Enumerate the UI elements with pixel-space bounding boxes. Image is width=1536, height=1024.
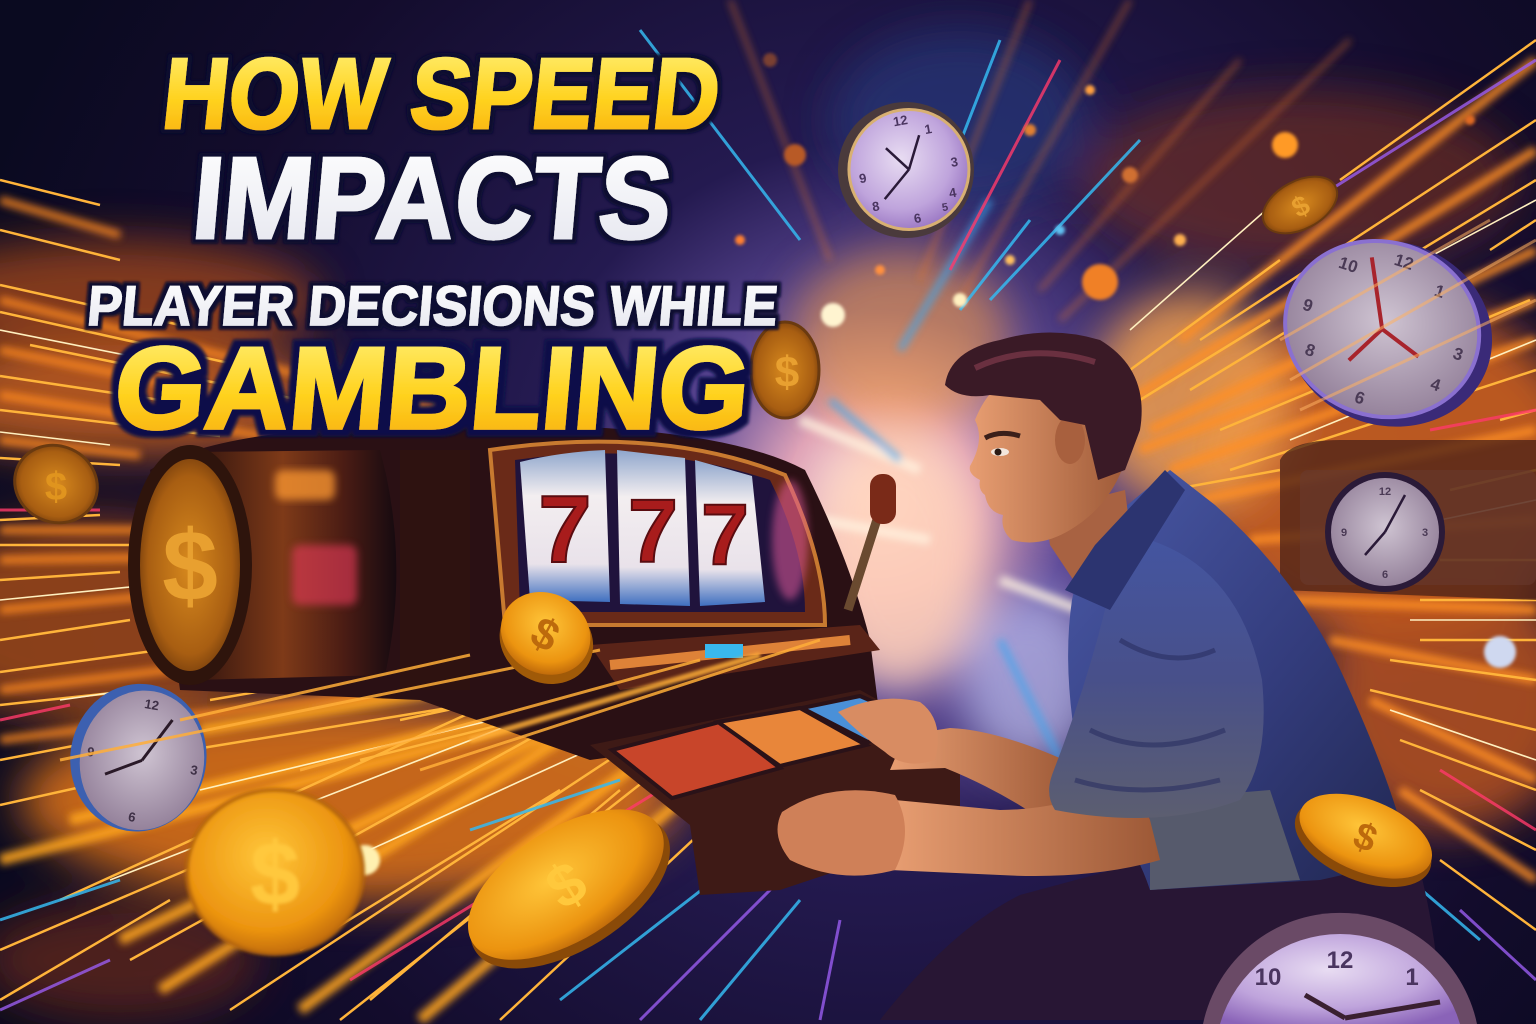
open collar: [1065, 470, 1185, 610]
clock: top centre: 1: [923, 121, 933, 137]
clock: large right: 1: [1432, 281, 1447, 302]
clock: mid right: 12: [1379, 486, 1391, 498]
clock: top centre: 4: [948, 185, 958, 201]
forearm to upper hand: [890, 728, 1075, 825]
clock: bottom right: 10: [1255, 964, 1281, 991]
coin: left edge: [2, 432, 110, 536]
upper hand: [838, 699, 938, 764]
side drum: [190, 450, 396, 680]
eye and brow: [985, 433, 1020, 456]
sleeve folds: [1075, 640, 1225, 790]
clock: large right: 9: [1300, 295, 1315, 316]
clock: large right: 3: [1451, 344, 1466, 365]
title line 4: GAMBLING: [110, 323, 755, 453]
clock: bottom right: 12: [1327, 947, 1353, 974]
ear: [1055, 416, 1085, 464]
title: [85, 38, 780, 453]
coin: behind title: [751, 322, 819, 418]
coin: behind title: $: [775, 348, 799, 397]
clock: top centre: 5: [941, 201, 949, 214]
coin: lower right: [1282, 776, 1446, 905]
title line 3: PLAYER DECISIONS WHILE: [85, 274, 780, 337]
bokeh sparks: [350, 53, 1516, 875]
clock: large right: [1260, 213, 1516, 453]
clock: mid right: [1325, 472, 1445, 592]
coin: large bottom left: $: [250, 825, 300, 925]
clock: large right: 10: [1336, 253, 1360, 277]
clock: large right: 4: [1428, 374, 1443, 395]
clock: lower left: 9: [86, 744, 96, 760]
clock: bottom right: 1: [1405, 964, 1419, 991]
background slot machine silhouette: right: [1280, 440, 1536, 600]
button cards: [612, 722, 780, 798]
clock: bottom right: [1203, 913, 1477, 1024]
clock: top centre: 9: [858, 170, 868, 186]
clock hands: [1365, 495, 1405, 555]
coin: upper right: $: [1287, 189, 1315, 224]
clock: mid right: 9: [1341, 527, 1347, 539]
coin: on slot machine: $: [523, 607, 567, 662]
clock hands: [105, 710, 172, 784]
screen frame: [490, 442, 825, 625]
clock: lower left: 3: [189, 762, 199, 778]
shirt torso: [1068, 470, 1410, 890]
clock: large right: 12: [1392, 250, 1416, 274]
clock hands: [1305, 995, 1440, 1018]
slot machine: $: [162, 510, 218, 622]
lower arm: [890, 780, 1160, 876]
coin: upper right: [1253, 165, 1347, 245]
clock: mid right: 6: [1382, 569, 1388, 581]
clock: large right: 8: [1303, 340, 1317, 361]
coin: lower right: $: [1347, 815, 1383, 861]
coin: bottom centre: $: [534, 848, 598, 922]
lever: [848, 510, 880, 610]
face: [970, 380, 1130, 542]
clock: lower left: 12: [143, 696, 160, 713]
clock: top centre: [827, 91, 985, 249]
clock: top centre: 3: [949, 154, 959, 170]
trousers: [880, 860, 1440, 1020]
coin: bottom centre: [441, 778, 696, 1000]
machine body: [150, 425, 880, 760]
reels with sevens: 7: [628, 482, 678, 582]
coin: large bottom left: [187, 790, 363, 954]
streaks across the slot machine: [60, 640, 820, 770]
reels with sevens: [520, 450, 765, 606]
slot machine: [128, 425, 960, 895]
lower fist: [778, 790, 905, 876]
clock: mid right: 3: [1422, 527, 1428, 539]
clock hands: [1339, 257, 1443, 380]
round side emblem: [128, 445, 252, 685]
reels with sevens: 7: [538, 476, 592, 583]
shirt sleeve: [1049, 540, 1264, 818]
streaks over the large clock: [1280, 220, 1536, 410]
clock: large right: 6: [1352, 388, 1367, 409]
reels with sevens: 7: [701, 487, 749, 583]
coin: left edge: $: [45, 465, 67, 509]
hair: [945, 332, 1142, 480]
coin: on slot machine: [482, 576, 610, 700]
light panel: [590, 625, 880, 690]
console: [590, 690, 960, 895]
title line 2: IMPACTS: [188, 133, 677, 263]
clock: lower left: 6: [127, 809, 137, 825]
clock hands: [875, 135, 929, 199]
clock: lower left: [59, 673, 218, 842]
neck: [1045, 490, 1130, 590]
lower shirt front: [1150, 790, 1300, 890]
clock: top centre: 12: [892, 112, 909, 129]
clock: top centre: 8: [871, 198, 881, 214]
man leaning toward the slot machine: [778, 332, 1440, 1020]
title line 1: HOW SPEED: [158, 38, 725, 150]
clock: top centre: 6: [913, 210, 922, 226]
